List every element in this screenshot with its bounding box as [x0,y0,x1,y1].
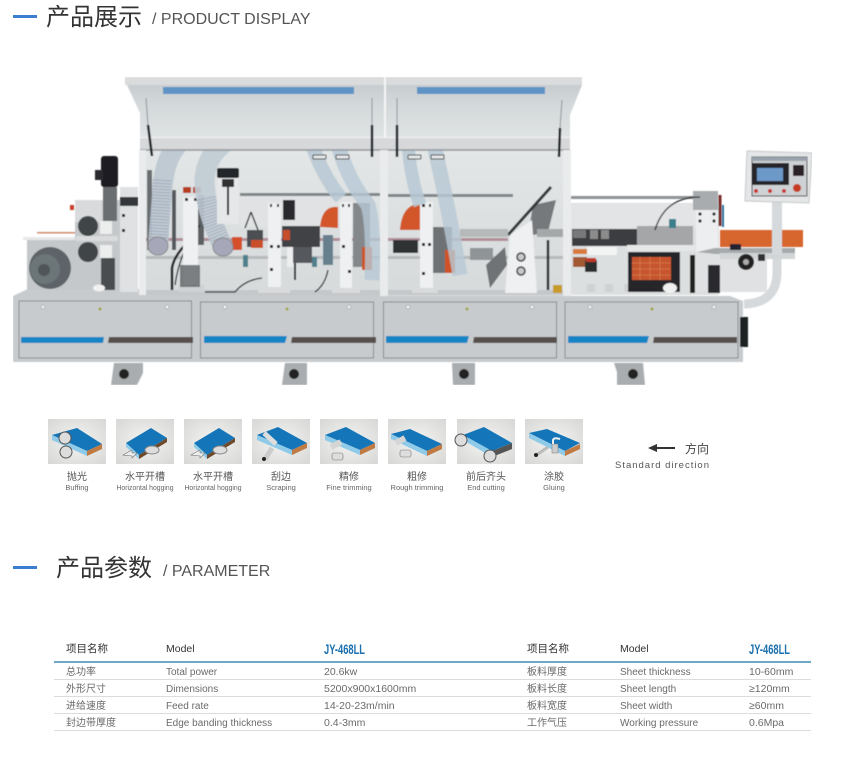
process: rough trimming: 粗修 [407,470,427,483]
open hood [125,77,582,150]
table right column rows: ≥120mm [749,683,790,695]
section heading: parameter: 产品参数 [56,555,152,582]
section heading: parameter [13,555,270,582]
gluing unit [573,247,767,293]
gas struts [146,98,562,157]
table left column rows: 封边带厚度 [66,716,116,729]
input column and sensor [655,191,724,252]
process: scraping [252,419,310,492]
table left column rows: 14-20-23m/min [324,700,395,712]
process: fine trimming: Fine trimming [326,483,372,492]
support arm for control panel [744,200,777,304]
trimming units with orange housings [147,170,493,280]
process: horizontal hogging 2: 水平开槽 [193,470,233,483]
process: buffing [48,419,106,492]
machine feet [111,363,645,385]
table left column rows: 0.4-3mm [324,717,366,729]
process: rough trimming: Rough trimming [391,483,443,492]
process: horizontal hogging 1: 水平开槽 [125,470,165,483]
process: gluing: 涂胶 [544,470,564,483]
table left column rows: Dimensions [166,684,218,695]
rear wall of machine [140,148,570,296]
table right column rows: Sheet length [620,684,676,695]
pressure gauge unit and tilting guide [460,187,563,293]
direction legend: Standard direction [615,460,709,471]
right low section wall [571,196,719,295]
table right column rows: 板料厚度 [527,665,567,678]
edge banding machine illustration [13,77,812,385]
section heading: parameter: / PARAMETER [163,563,270,580]
table right column rows: 0.6Mpa [749,717,784,729]
process: buffing: Buffing [65,483,89,492]
process: rough trimming [388,419,446,492]
pillars [139,150,571,296]
direction legend: 方向 [685,441,709,456]
process: horizontal hogging 1 [116,419,174,492]
machine base [13,289,748,362]
table left column rows: Total power [166,667,218,678]
table right column rows: Sheet width [620,701,672,712]
process: horizontal hogging 2: Horizontal hogging [184,483,242,492]
table left column rows: 外形尺寸 [66,682,106,695]
table rules [54,661,811,731]
buffing unit and main motor [23,156,138,292]
small dark bolts and gear [180,187,431,287]
control panel [745,151,812,203]
process: gluing [525,419,583,492]
table header row: 项目名称 [66,642,108,655]
table left column rows: 进给速度 [66,699,106,712]
table header row: Model [166,643,195,655]
support arm upper [772,200,782,255]
table right column rows: Working pressure [620,718,699,729]
orange feed table [697,230,803,270]
table left column rows: 20.6kw [324,666,358,678]
direction legend [615,441,709,471]
process: fine trimming [320,419,378,492]
section heading: product display: 产品展示 [46,4,142,31]
process: buffing: 抛光 [67,470,87,483]
table right column rows: 10-60mm [749,666,794,678]
white mounting plates [179,197,438,293]
table right column rows: Sheet thickness [620,667,691,678]
table header row: JY-468LL [749,641,790,657]
rail and belt [146,193,563,295]
section heading: product display [13,4,311,31]
table right column rows: 板料长度 [527,682,567,695]
process: scraping: 刮边 [271,470,291,483]
table right column rows: 工作气压 [527,716,567,729]
table header row: 项目名称 [527,642,569,655]
table right column rows: 板料宽度 [527,699,567,712]
process: end cutting: 前后齐头 [466,470,506,483]
table header row [66,641,790,657]
parameter table [54,641,811,731]
table left column rows: 总功率 [66,665,96,678]
process: end cutting [455,419,515,492]
motor block on wall [217,168,239,224]
process: horizontal hogging 1: Horizontal hogging [116,483,174,492]
table left column rows: Feed rate [166,701,209,712]
table header row: Model [620,643,649,655]
process: fine trimming: 精修 [339,470,359,483]
cable bundles [172,212,328,292]
process: horizontal hogging 2 [184,419,242,492]
section heading: product display: / PRODUCT DISPLAY [152,11,311,28]
process: gluing: Gluing [543,483,565,492]
table left column rows: Edge banding thickness [166,718,272,729]
process: end cutting: End cutting [467,483,505,492]
table left column rows [66,665,416,729]
table right column rows: ≥60mm [749,700,784,712]
flexible dust hoses [148,140,460,280]
table header row: JY-468LL [324,641,365,657]
process: scraping: Scraping [266,483,296,492]
table right column rows [527,665,794,729]
hose clamps [313,155,444,159]
process icon row [48,419,583,492]
table left column rows: 5200x900x1600mm [324,683,416,695]
